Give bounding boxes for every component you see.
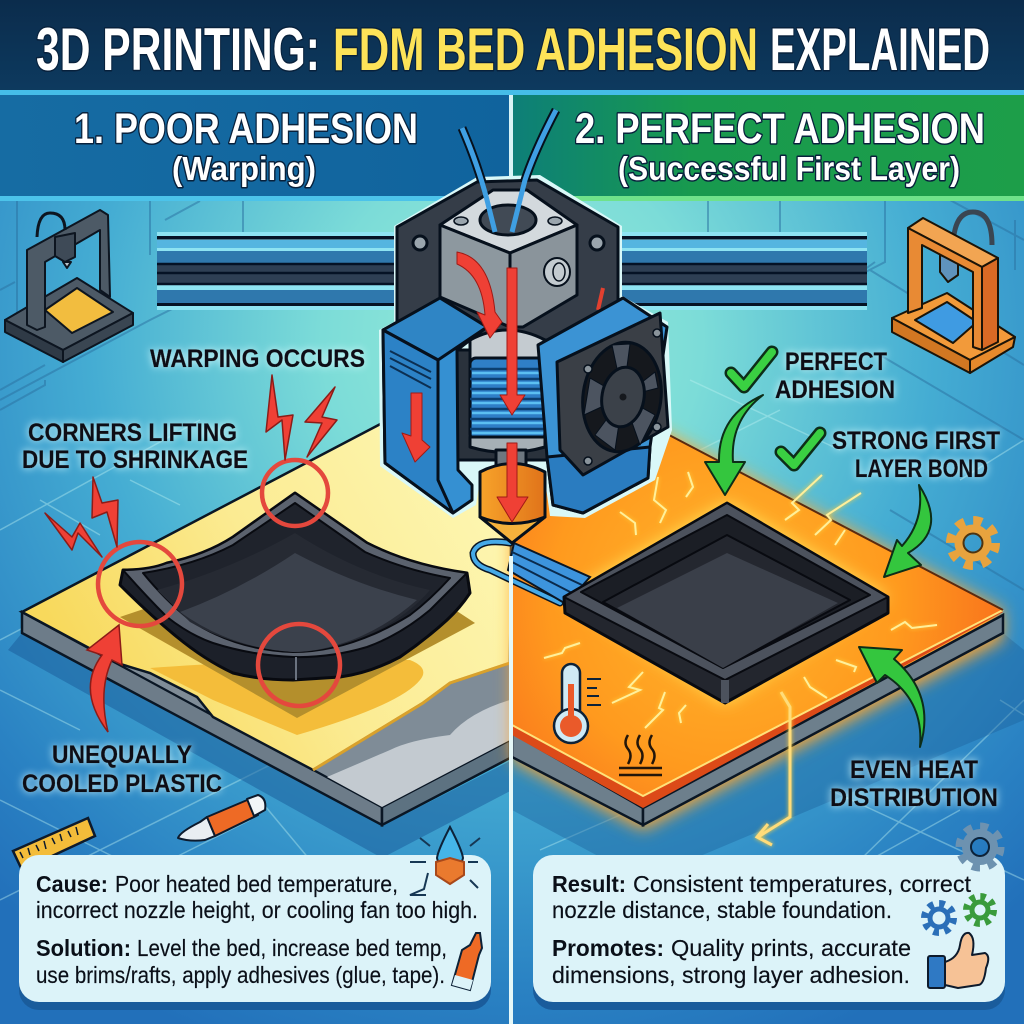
hotend assembly <box>379 110 672 543</box>
top title bar <box>0 0 1024 95</box>
section header left <box>0 95 510 201</box>
callout: corners lifting: DUE TO SHRINKAGE <box>22 446 248 474</box>
callout: unequally cooled plastic <box>22 741 222 798</box>
print shadow <box>120 590 475 718</box>
section header right <box>513 95 1024 201</box>
title: 3D PRINTING: <box>36 16 320 83</box>
icon: nozzle with droplet <box>410 827 480 895</box>
panel: cause and solution <box>19 855 491 1010</box>
heat sink backing <box>457 350 557 460</box>
left print bed slab <box>8 398 512 858</box>
panel: cause and solution: Cause: <box>36 871 108 897</box>
icon: grey-blue gear <box>960 827 1000 867</box>
section header right: (Successful First Layer) <box>618 150 960 187</box>
red warning circles <box>98 460 340 706</box>
centre divider bottom <box>509 556 513 1024</box>
callout: perfect adhesion: ADHESION <box>775 376 895 404</box>
section header left: 1. POOR ADHESION <box>74 105 418 153</box>
left panel tools: ruler <box>13 818 95 870</box>
heat sink collar <box>470 330 545 362</box>
title <box>36 16 990 83</box>
blue bowden tubes outline <box>462 110 556 235</box>
callout: strong first layer bond: STRONG FIRST <box>832 427 1000 455</box>
metal block <box>440 190 577 253</box>
red flow arrows <box>402 252 528 522</box>
carriage plate <box>397 180 618 340</box>
left blue shroud <box>383 298 487 513</box>
callout: even heat distribution: DISTRIBUTION <box>830 784 998 812</box>
heat sink fins <box>470 358 545 440</box>
orange heated bed surface <box>512 425 1003 796</box>
filament strands to right print <box>473 542 590 604</box>
callout: unequally cooled plastic: COOLED PLASTIC <box>22 770 222 798</box>
callout: unequally cooled plastic: UNEQUALLY <box>52 741 192 769</box>
red wire <box>598 288 603 310</box>
small printer right <box>892 212 1015 373</box>
orange glow around bed <box>512 425 1003 830</box>
panel: result and promotes: Consistent temperatures, correct <box>633 871 971 897</box>
tray glow <box>564 503 888 703</box>
title: FDM BED ADHESION <box>333 16 758 83</box>
panel: cause and solution: use brims/rafts, apply adhesives (glue, tape). <box>36 962 445 988</box>
panel: cause and solution: Poor heated bed temperature, <box>115 871 398 897</box>
panel: result and promotes <box>533 855 1005 1010</box>
right shroud <box>538 298 667 513</box>
panel: cause and solution: Solution: <box>36 935 131 961</box>
callout: strong first layer bond: LAYER BOND <box>855 455 988 483</box>
grey slab top face <box>22 600 510 807</box>
callout: strong first layer bond <box>832 427 1000 483</box>
panel: cause and solution: incorrect nozzle height, or cooling fan too high. <box>36 897 478 923</box>
panel: result and promotes: nozzle distance, stable foundation. <box>552 897 892 923</box>
panel: result and promotes: dimensions, strong layer adhesion. <box>552 962 910 988</box>
panel: cause and solution: Level the bed, increase bed temp, <box>137 935 447 961</box>
nozzle <box>480 464 545 543</box>
glowing heat arrow <box>757 692 790 845</box>
centre divider top <box>509 95 513 195</box>
icon: thumbs up <box>928 933 988 988</box>
callout: even heat distribution: EVEN HEAT <box>850 756 978 784</box>
green arrows <box>705 395 931 747</box>
orange gear icon <box>952 522 994 564</box>
callout: perfect adhesion: PERFECT <box>785 348 887 376</box>
heat waves icon <box>619 735 662 775</box>
fan body <box>557 313 668 475</box>
icon: small glue bottle <box>452 933 482 990</box>
panel: result and promotes: Promotes: <box>552 935 664 961</box>
linear rail right <box>618 232 867 310</box>
thermometer icon <box>554 664 601 743</box>
callout: even heat distribution <box>830 756 998 812</box>
perfect black print <box>564 503 888 703</box>
heat sparks on bed <box>544 472 937 728</box>
right print bed slab <box>512 425 1024 880</box>
section header left: (Warping) <box>172 150 316 187</box>
lightning bolts warping <box>45 375 337 557</box>
panel: result and promotes: Quality prints, accurate <box>671 935 911 961</box>
tubes colour <box>462 110 556 232</box>
panel: result and promotes: Result: <box>552 871 626 897</box>
light outline glow <box>379 175 672 518</box>
left panel tools: glue tube <box>178 795 265 841</box>
icon: blue gear <box>925 904 953 932</box>
callout: perfect adhesion <box>775 348 895 404</box>
red arrow to cooled plastic <box>87 625 122 732</box>
small printer left <box>5 210 133 362</box>
linear rail left <box>157 232 402 310</box>
warped black print <box>120 493 470 680</box>
yellow bed surface <box>22 398 512 770</box>
green check marks <box>731 352 820 465</box>
callout: corners lifting <box>22 419 248 474</box>
icon: green gear <box>967 897 993 923</box>
callout: warping occurs: WARPING OCCURS <box>150 345 365 373</box>
amber heat patch under print <box>150 660 423 735</box>
callout: corners lifting: CORNERS LIFTING <box>28 419 237 447</box>
